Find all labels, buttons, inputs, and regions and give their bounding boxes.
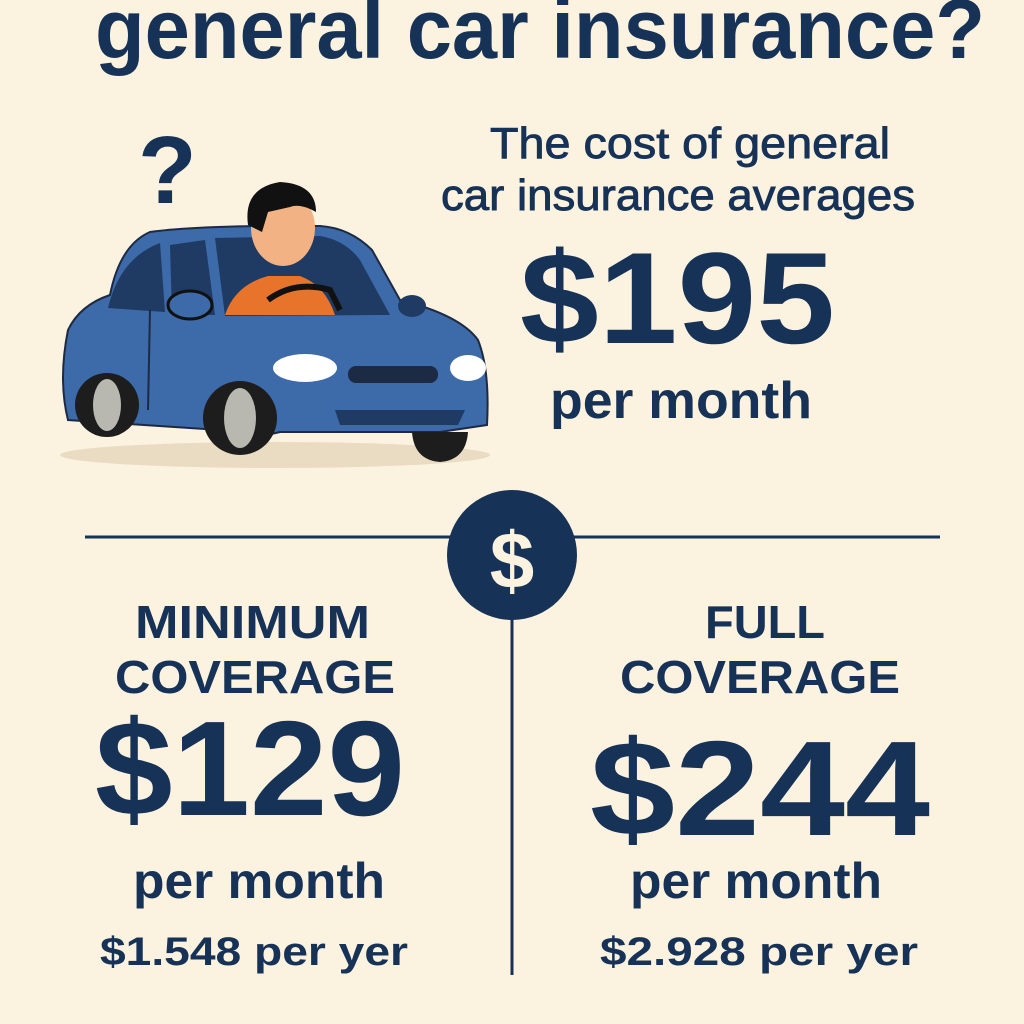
panel: full coverage: $244 (590, 713, 930, 864)
text: cost intro (441, 119, 915, 220)
text: per month: per month (550, 372, 812, 430)
panel: minimum coverage: COVERAGE (115, 651, 395, 703)
mirror (398, 295, 426, 317)
panel: full coverage: FULL (705, 596, 825, 648)
panel: full coverage: per month (630, 853, 882, 909)
panel: minimum coverage: $1.548 per yer (100, 930, 408, 974)
panel: minimum coverage: MINIMUM (135, 596, 370, 648)
person (225, 182, 340, 315)
icon: question mark: ? (138, 117, 197, 224)
wheels (75, 373, 139, 437)
panel: full coverage: $2.928 per yer (600, 930, 918, 974)
panel: minimum coverage: per month (133, 853, 385, 909)
panel: full coverage: COVERAGE (620, 651, 900, 703)
icon: dollar circle (447, 490, 577, 620)
text: cost intro: The cost of general (490, 119, 890, 168)
icon: dollar circle: $ (490, 516, 534, 605)
body (63, 226, 488, 436)
text: cost intro: car insurance averages (441, 171, 915, 220)
car illustration (60, 182, 490, 468)
divider lines (85, 537, 940, 975)
panel: minimum coverage (95, 596, 408, 974)
big number: $195: $195 (520, 225, 835, 371)
headlights and grille (273, 354, 337, 382)
panel: full coverage (590, 596, 930, 974)
panel: minimum coverage: $129 (95, 693, 405, 844)
windows (108, 243, 165, 312)
